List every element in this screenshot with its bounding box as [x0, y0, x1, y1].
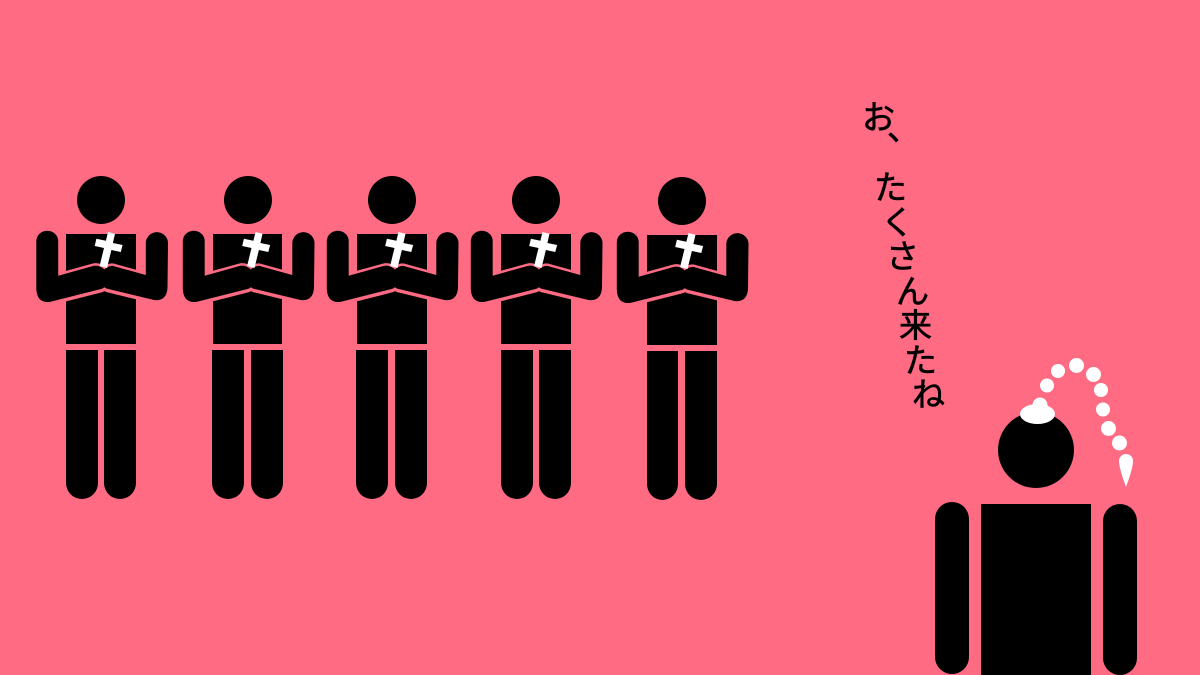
figure: praying person 1 [36, 176, 168, 499]
head [998, 412, 1074, 488]
left arm [935, 502, 969, 674]
figure: praying person 2 [183, 176, 314, 499]
speech text: slanted vertical line: お、たくさん来たね [862, 99, 945, 413]
figure: person seen from behind [935, 412, 1137, 675]
figure: praying person 4 [471, 176, 602, 499]
figure: praying person 5 [617, 177, 748, 500]
figure: praying person 3 [327, 176, 458, 499]
torso [981, 504, 1091, 675]
right arm [1103, 504, 1137, 675]
icon: dotted white thought trail from head [1020, 358, 1133, 487]
